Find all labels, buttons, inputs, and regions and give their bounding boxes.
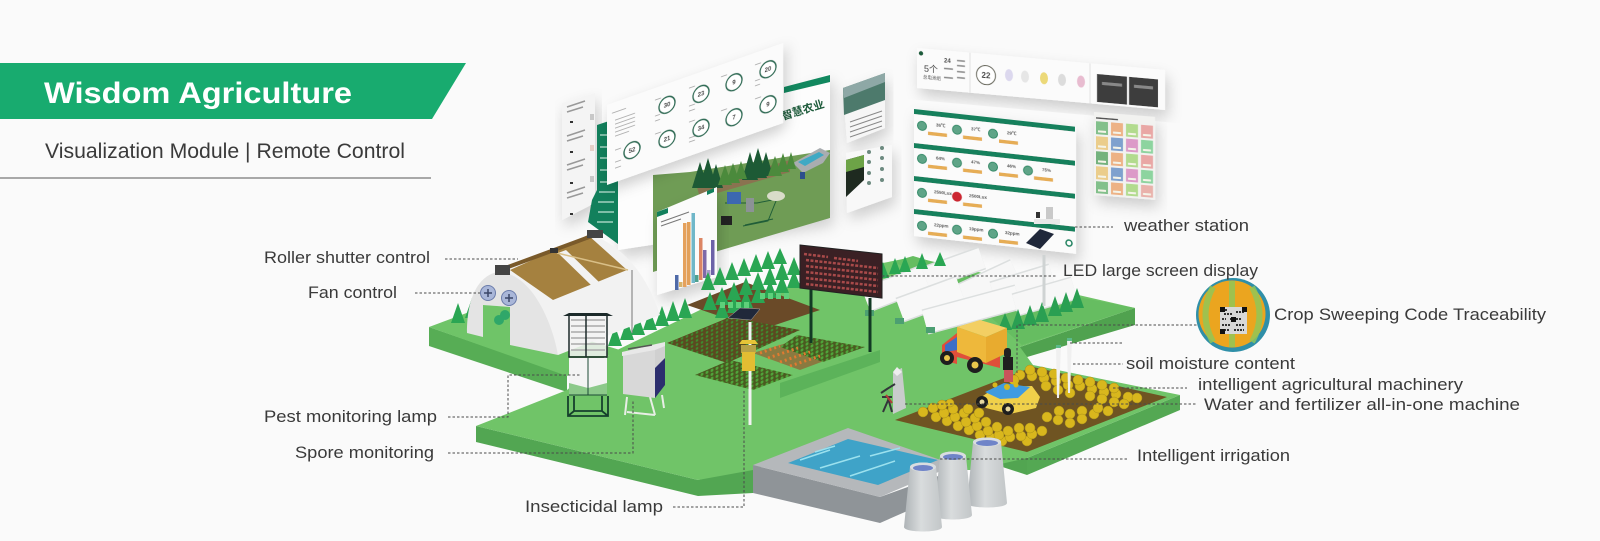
readings: 37℃ — [971, 126, 981, 132]
floating panel: ring statistics: 9 — [766, 101, 770, 109]
spore monitoring cabinet — [622, 342, 665, 415]
floating panel: ring statistics: 30 — [664, 101, 671, 110]
readings: 2500Lux — [969, 193, 987, 200]
orange tags — [928, 132, 1053, 249]
leader: fan — [415, 292, 480, 294]
weather station — [1026, 207, 1060, 306]
floating panel: ring statistics — [607, 43, 783, 185]
leader: traceability — [1017, 325, 1197, 373]
central count ring — [976, 65, 996, 85]
yellow fruit — [918, 365, 1142, 446]
brown roller shutter — [510, 235, 627, 300]
floating panel: overview strip — [917, 48, 1165, 110]
greenhouse doors — [865, 310, 935, 333]
bushes — [720, 284, 825, 305]
leader: LED screen — [882, 275, 1057, 277]
trees behind greenhouse — [451, 298, 479, 323]
floating panel: green navigation — [588, 118, 618, 244]
label: insecticidal lamp: Insecticidal lamp — [525, 497, 663, 516]
insecticidal lamp — [728, 308, 760, 425]
floating panel: ring statistics: 34 — [698, 124, 705, 133]
water pool — [753, 428, 955, 523]
label: crop sweeping code traceability: Crop Sweeping Code Traceability — [1274, 305, 1547, 324]
readings: 35℃ — [936, 122, 946, 129]
leader: pest lamp — [448, 375, 580, 417]
far right tree row — [998, 288, 1084, 330]
leader: water and fertilizer — [905, 403, 1197, 405]
title banner — [0, 63, 466, 119]
label: LED large screen display: LED large screen display — [1063, 261, 1259, 280]
readings: 19ppm — [969, 226, 983, 233]
metric rings — [624, 59, 776, 164]
floating dashboard: main screen: 智慧农业 — [780, 97, 826, 123]
floating panel: ring statistics: 52 — [629, 146, 636, 155]
ground: greenhouse platform — [429, 308, 620, 392]
readings: 2550Lux — [934, 189, 952, 196]
leader: roller shutter — [445, 258, 518, 260]
fans — [480, 286, 496, 300]
sprayer operator figure — [881, 367, 906, 414]
ground: main farm platform — [476, 256, 1180, 496]
leader: insecticidal lamp — [673, 390, 744, 507]
central count ring: 22 — [982, 71, 991, 81]
readings: 75% — [1042, 167, 1051, 173]
label: fan control: Fan control — [308, 283, 397, 302]
readings: 29℃ — [1007, 130, 1017, 136]
label: roller shutter control: Roller shutter control — [264, 248, 430, 267]
floating panel: colour tile grid — [1094, 112, 1155, 200]
status dots — [1005, 69, 1085, 88]
crop plots — [667, 282, 865, 390]
floating panel: ring statistics: 9 — [732, 79, 736, 87]
delivery truck — [940, 320, 1007, 373]
title banner: Wisdom Agriculture — [44, 77, 352, 110]
leader: machinery — [1113, 387, 1187, 389]
floating panel: ring statistics: 20 — [765, 65, 772, 74]
floating panel: photo article — [843, 73, 885, 143]
sensor circles — [918, 121, 1032, 243]
readings: 64% — [936, 155, 945, 161]
floating panel: overview strip: 总电池组 — [923, 74, 941, 81]
readings — [934, 122, 1051, 240]
floating panel: device list — [846, 145, 892, 213]
readings: 32ppm — [1005, 230, 1019, 237]
subtitle: Visualization Module | Remote Control — [45, 140, 405, 163]
tree rows — [608, 248, 946, 346]
label: spore monitoring: Spore monitoring — [295, 443, 434, 462]
soil moisture sensors — [1056, 338, 1072, 398]
readings: 47% — [971, 159, 980, 165]
crops in doorway — [494, 310, 510, 325]
label: intelligent irrigation: Intelligent irrigation — [1137, 446, 1290, 465]
label: pest monitoring lamp: Pest monitoring lamp — [264, 407, 437, 426]
brown soil field — [895, 365, 1167, 452]
leader: irrigation — [940, 458, 1127, 460]
LED screen — [800, 245, 882, 352]
greenhouse with roller shutter and fans — [467, 230, 660, 355]
pest monitoring lamp — [563, 313, 613, 416]
cylindrical irrigation tanks — [904, 438, 1007, 532]
readings: 46% — [1007, 163, 1016, 169]
floating panel: side cards — [562, 93, 595, 220]
3D farm scene in screen — [653, 148, 830, 272]
readings: 22ppm — [934, 222, 948, 229]
label: intelligent agricultural machinery: intelligent agricultural machinery — [1198, 375, 1464, 394]
leader: weather station — [1075, 226, 1113, 228]
bar chart panel — [657, 187, 717, 295]
far greenhouse tunnels — [866, 258, 1074, 322]
video thumbnails — [1097, 74, 1158, 107]
label: weather station: weather station — [1123, 216, 1249, 235]
QR traceability sphere — [1196, 278, 1270, 352]
label: water and fertilizer machine: Water and fertilizer all-in-one machine — [1204, 395, 1520, 414]
floating panel: ring statistics: 7 — [732, 114, 736, 122]
floating panel: ring statistics: 23 — [698, 90, 705, 99]
floating dashboard: main screen — [618, 73, 830, 272]
floating panel: sensor readings — [914, 109, 1076, 254]
floating panel: overview strip: 5个 — [924, 64, 938, 75]
floating panel: ring statistics: 21 — [664, 135, 671, 144]
farmer figure — [1003, 348, 1013, 382]
label: soil moisture content: soil moisture content — [1126, 354, 1295, 373]
leader: soil moisture — [1073, 363, 1123, 365]
intelligent agricultural machinery robot — [976, 382, 1040, 415]
leader: upper sensor — [1070, 342, 1123, 344]
leader: spore — [448, 400, 633, 453]
floating panel: overview strip: 24 — [944, 58, 951, 65]
